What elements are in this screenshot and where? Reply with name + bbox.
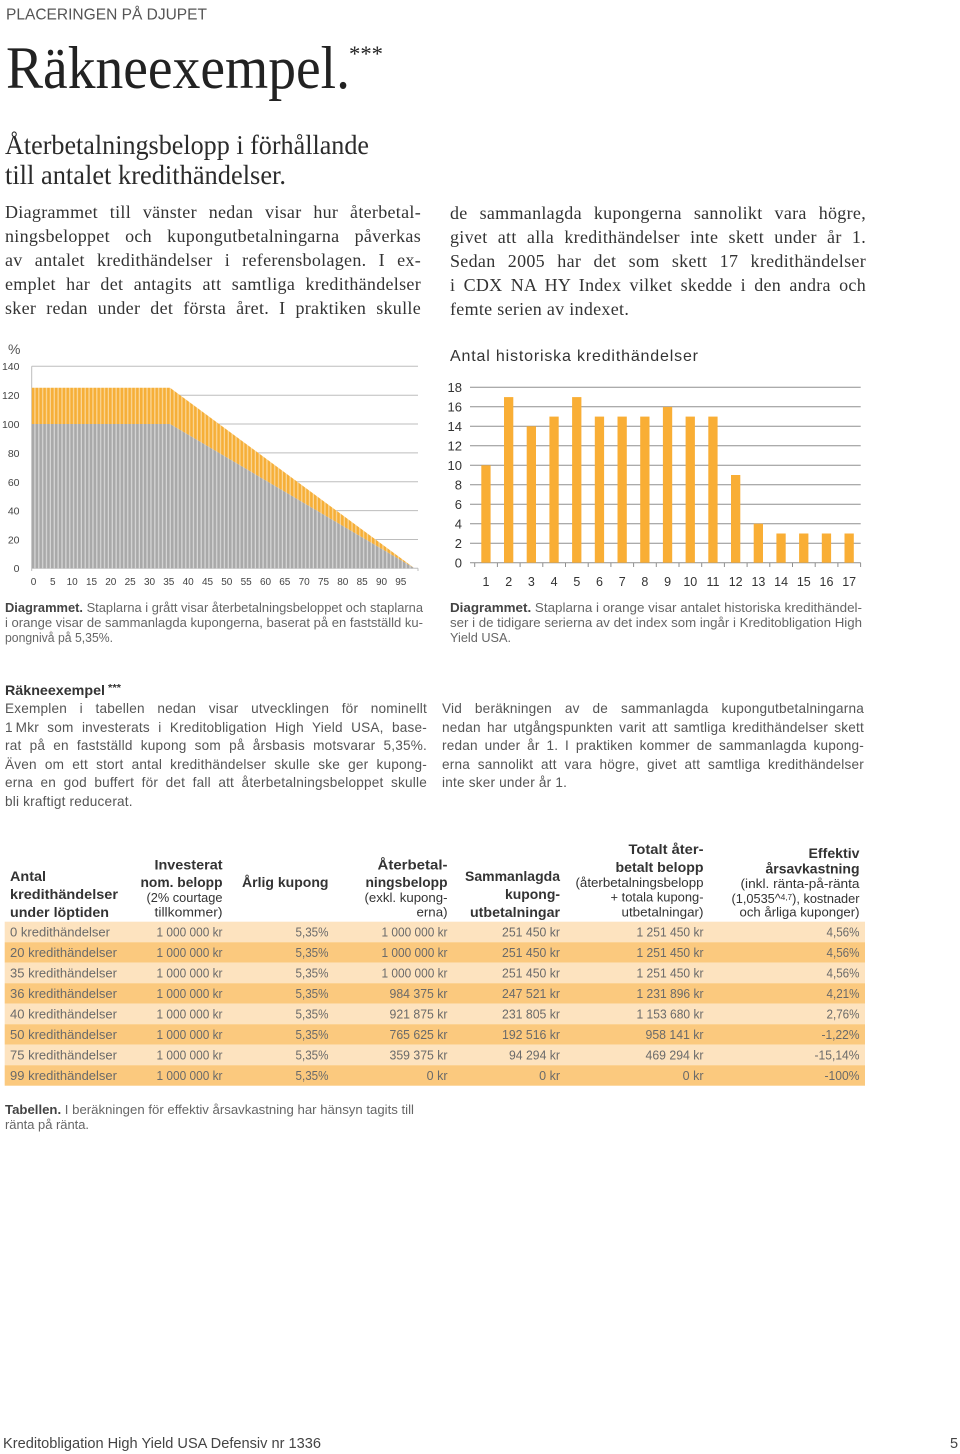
example text: left column: 1 Mkr som investerats i Kreditobligation High Yield USA, base- xyxy=(5,720,427,735)
column: repayment: 921 875 kr xyxy=(390,1008,448,1022)
column: invested: 1 000 000 kr xyxy=(156,1028,222,1042)
column: repayment xyxy=(382,926,448,1083)
y axis labels: 0 xyxy=(14,563,20,575)
subtitle xyxy=(5,130,369,190)
column: coupon total: 251 450 kr xyxy=(502,946,560,960)
column: total repaid: 1 231 896 kr xyxy=(636,987,704,1001)
y axis labels: 14 xyxy=(448,419,462,434)
header: effective annual return: 4,7 xyxy=(781,893,793,902)
x axis labels: 15 xyxy=(797,575,811,589)
caption: left chart: pongnivå på 5,35%. xyxy=(5,631,113,645)
column: coupon total: 251 450 kr xyxy=(502,926,560,940)
header: number of events xyxy=(10,868,119,920)
header: repayment amount: (exkl. kupong- xyxy=(364,891,448,905)
header: repayment amount xyxy=(364,856,448,920)
y axis labels: 80 xyxy=(8,448,20,460)
y axis labels: 20 xyxy=(8,534,20,546)
subtitle: till antalet kredithändelser. xyxy=(5,160,286,190)
y axis labels: 2 xyxy=(455,536,462,551)
x axis labels: 2 xyxy=(505,575,512,589)
title: *** xyxy=(349,41,383,66)
header: total coupons: utbetalningar xyxy=(470,904,561,920)
table note: ränta på ränta. xyxy=(5,1118,89,1132)
caption: right chart: ser i de tidigare serierna av det index som ingår i Kreditobligation High xyxy=(450,616,862,630)
x axis labels: 80 xyxy=(337,577,349,588)
y axis labels: 60 xyxy=(8,477,20,489)
example text: left column xyxy=(5,701,427,809)
x axis labels: 15 xyxy=(86,577,97,588)
column: invested xyxy=(156,926,222,1083)
x axis labels: 90 xyxy=(376,577,387,588)
x axis labels: 14 xyxy=(774,575,788,589)
table header xyxy=(10,841,860,920)
x axis labels xyxy=(31,577,407,588)
y axis labels xyxy=(448,380,462,570)
header: total repaid: + totala kupong- xyxy=(610,890,704,904)
table body xyxy=(10,926,860,1083)
y axis labels: 100 xyxy=(2,419,20,431)
column: coupon total: 192 516 kr xyxy=(502,1028,560,1042)
footer xyxy=(3,1436,958,1452)
header: annual coupon: Årlig kupong xyxy=(242,874,328,890)
intro text: right column: Sedan 2005 har det som skett 17 kredithändelser xyxy=(450,251,866,271)
column: invested: 1 000 000 kr xyxy=(156,1048,222,1062)
x axis labels xyxy=(483,575,856,589)
x axis labels: 17 xyxy=(842,575,856,589)
x axis labels: 6 xyxy=(596,575,603,589)
header: effective annual return: (1,0535^ xyxy=(732,892,780,906)
x axis labels: 3 xyxy=(528,575,535,589)
column: credit events: 0 kredithändelser xyxy=(10,926,110,940)
column: credit events: 99 kredithändelser xyxy=(10,1069,117,1083)
example text: left column: Exemplen i tabellen nedan visar utvecklingen för nominellt xyxy=(5,701,427,716)
y axis labels: 120 xyxy=(2,390,20,402)
header: total coupons: Sammanlagda xyxy=(465,868,560,884)
header: number of events: under löptiden xyxy=(10,904,109,920)
title: Räkneexempel. xyxy=(6,35,350,101)
footer: Kreditobligation High Yield USA Defensiv nr 1336 xyxy=(3,1436,321,1452)
table note xyxy=(5,1103,414,1132)
header: effective annual return: (inkl. ränta-på-ränta xyxy=(740,877,860,891)
x axis labels: 10 xyxy=(67,577,78,588)
column: repayment: 984 375 kr xyxy=(390,987,448,1001)
grey bars: repayment xyxy=(32,424,414,568)
column: effective return xyxy=(814,926,860,1083)
column: total repaid: 958 141 kr xyxy=(646,1028,704,1042)
column: credit events: 75 kredithändelser xyxy=(10,1048,117,1062)
example text: right column xyxy=(442,701,864,790)
x axis labels: 65 xyxy=(279,577,291,588)
caption: right chart: Diagrammet. Staplarna i orange visar antalet historiska kredithändel- xyxy=(450,601,862,615)
header: repayment amount: erna) xyxy=(416,906,448,920)
example text: right column: redan under år 1. I praktiken kommer de sammanlagda kupong- xyxy=(442,738,864,753)
column: coupon: 5,35% xyxy=(296,946,328,960)
y axis labels: 8 xyxy=(455,478,462,492)
subtitle: Återbetalningsbelopp i förhållande xyxy=(5,130,369,160)
caption: left chart: i orange visar de sammanlagda kupongerna, baserat på en fastställd ku- xyxy=(5,616,423,630)
column: effective return: 4,56% xyxy=(826,926,860,940)
x axis labels: 5 xyxy=(573,575,580,589)
x axis labels: 70 xyxy=(299,577,310,588)
header: total repaid: utbetalningar) xyxy=(622,906,704,920)
table background rows xyxy=(5,922,865,1086)
chart: repayment and coupons per number of credit events: % xyxy=(8,341,20,357)
header: effective annual return: årsavkastning xyxy=(766,860,860,876)
x axis labels: 1 xyxy=(483,575,490,589)
intro text: left column: Diagrammet till vänster nedan visar hur återbetal- xyxy=(5,202,421,222)
column: coupon: 5,35% xyxy=(296,1069,328,1083)
column: total repaid: 469 294 kr xyxy=(646,1048,704,1062)
chart: historical credit events per series xyxy=(448,380,861,589)
x axis labels: 12 xyxy=(729,575,743,589)
column: credit events: 20 kredithändelser xyxy=(10,946,117,960)
example text: left column: Även om ett stort antal kredithändelser skulle ske ger kupong- xyxy=(5,757,427,772)
column: effective return: -1,22% xyxy=(822,1028,860,1042)
header: effective annual return xyxy=(732,845,860,920)
example text: right column: inte sker under år 1. xyxy=(442,775,567,790)
example text: left column: rat på en fastställd kupong som på årsbasis motsvarar 5,35%. xyxy=(5,738,427,753)
intro text: right column: de sammanlagda kupongerna sannolikt vara högre, xyxy=(450,203,866,223)
caption: right chart xyxy=(450,601,862,645)
column: total repaid: 1 153 680 kr xyxy=(636,1008,704,1022)
intro text: right column: i CDX NA HY Index vilket skedde i den andra och xyxy=(450,275,866,295)
example text: right column: erna sannolikt att vara högre, givet att samtliga kredithändelser xyxy=(442,757,864,772)
header: total coupons xyxy=(465,868,561,920)
x axis labels: 85 xyxy=(357,577,368,588)
column: coupon xyxy=(296,926,328,1083)
intro text: left column: emplet har det antagits att samtliga kredithändelser xyxy=(5,274,421,294)
header: effective annual return: Effektiv xyxy=(808,845,860,861)
intro text: right column: givet att alla kredithändelser inte skett under år 1. xyxy=(450,227,866,247)
column: effective return: 4,56% xyxy=(826,966,860,980)
caption: left chart xyxy=(5,601,423,645)
heading: calculation example: Räkneexempel xyxy=(5,682,105,698)
column: coupon total xyxy=(502,926,560,1083)
example text: left column: bli kraftigt reducerat. xyxy=(5,794,133,809)
header: total repaid: Totalt åter- xyxy=(628,841,704,857)
x axis labels: 50 xyxy=(221,577,233,588)
column: invested: 1 000 000 kr xyxy=(156,926,222,940)
example text: right column: Vid beräkningen av de sammanlagda kupongutbetalningarna xyxy=(442,701,864,716)
x axis labels: 5 xyxy=(50,577,56,588)
intro text: left column: av antalet kredithändelser i referensbolagen. I ex- xyxy=(5,250,421,270)
y axis labels: 10 xyxy=(448,458,462,473)
chart: repayment and coupons per number of credit events xyxy=(2,341,418,588)
column: invested: 1 000 000 kr xyxy=(156,946,222,960)
x axis labels: 9 xyxy=(664,575,671,589)
column: credit events: 50 kredithändelser xyxy=(10,1028,117,1042)
header: invested amount xyxy=(140,856,223,920)
footer: 5 xyxy=(950,1436,958,1452)
column: repayment: 0 kr xyxy=(427,1069,448,1083)
column: effective return: 4,56% xyxy=(826,946,860,960)
x axis labels: 4 xyxy=(551,575,558,589)
header: number of events: Antal xyxy=(10,868,46,884)
y axis labels: 4 xyxy=(455,516,462,532)
x axis labels: 7 xyxy=(619,575,626,589)
example text: left column: erna en god buffert för det fall att återbetalningsbeloppet skulle xyxy=(5,775,427,790)
column: total repaid: 1 251 450 kr xyxy=(636,946,704,960)
x axis labels: 13 xyxy=(751,575,765,589)
x axis labels: 95 xyxy=(395,577,407,588)
y axis labels xyxy=(2,361,20,575)
column: repayment: 1 000 000 kr xyxy=(382,946,448,960)
header: invested amount: tillkommer) xyxy=(154,906,222,920)
intro text: left column xyxy=(5,202,421,318)
column: credit events xyxy=(10,926,117,1083)
header: total repaid: betalt belopp xyxy=(616,859,704,875)
column: credit events: 36 kredithändelser xyxy=(10,987,117,1001)
y axis labels: 40 xyxy=(8,506,20,518)
x axis labels: 25 xyxy=(125,577,136,588)
column: total repaid: 1 251 450 kr xyxy=(636,966,704,980)
intro text: right column: femte serien av indexet. xyxy=(450,299,629,319)
column: coupon total: 0 kr xyxy=(539,1069,560,1083)
header: effective annual return: och årliga kuponger) xyxy=(740,906,860,920)
header: invested amount: Investerat xyxy=(154,856,223,872)
column: invested: 1 000 000 kr xyxy=(156,987,222,1001)
example text: right column: nedan har utgångspunkten varit att samtliga kredithändelser skett xyxy=(442,720,864,735)
heading: calculation example: *** xyxy=(108,683,121,694)
header: total coupons: kupong- xyxy=(505,886,560,902)
column: invested: 1 000 000 kr xyxy=(156,966,222,980)
orange bars: coupons xyxy=(32,388,414,568)
column: coupon: 5,35% xyxy=(296,987,328,1001)
intro text: right column xyxy=(450,203,866,319)
column: effective return: -100% xyxy=(824,1069,860,1083)
y axis labels: 140 xyxy=(2,361,20,373)
x axis labels: 16 xyxy=(820,575,833,589)
caption: right chart: Yield USA. xyxy=(450,631,511,645)
chart title: historical credit events: Antal historiska kredithändelser xyxy=(450,348,699,365)
y axis labels: 0 xyxy=(455,556,462,570)
x axis labels: 0 xyxy=(31,577,37,588)
column: credit events: 40 kredithändelser xyxy=(10,1008,117,1022)
x axis labels: 40 xyxy=(183,577,194,588)
caption: left chart: Diagrammet. Staplarna i grått visar återbetalningsbeloppet och staplarna xyxy=(5,601,423,615)
x axis labels: 8 xyxy=(641,575,648,589)
header: effective annual return: ), kostnader xyxy=(792,892,860,906)
column: repayment: 1 000 000 kr xyxy=(382,966,448,980)
x axis labels: 10 xyxy=(683,575,697,589)
column: total repaid: 0 kr xyxy=(683,1069,704,1083)
column: coupon: 5,35% xyxy=(296,926,328,940)
column: effective return: 2,76% xyxy=(826,1008,860,1022)
column: coupon total: 247 521 kr xyxy=(502,987,560,1001)
column: total repaid xyxy=(636,926,704,1083)
header: total repaid xyxy=(576,841,704,920)
x axis labels: 11 xyxy=(707,575,720,589)
column: effective return: 4,21% xyxy=(826,987,860,1001)
y axis labels: 16 xyxy=(448,400,462,414)
x axis labels: 45 xyxy=(202,577,213,588)
column: coupon: 5,35% xyxy=(296,1008,328,1022)
header: invested amount: (2% courtage xyxy=(146,891,223,905)
column: coupon: 5,35% xyxy=(296,966,328,980)
column: coupon: 5,35% xyxy=(296,1028,328,1042)
header: number of events: kredithändelser xyxy=(10,886,119,902)
column: effective return: -15,14% xyxy=(814,1048,860,1062)
y axis labels: 12 xyxy=(448,438,462,454)
intro text: left column: sker redan under det första året. I praktiken skulle xyxy=(5,298,421,318)
column: coupon total: 231 805 kr xyxy=(502,1008,560,1022)
column: credit events: 35 kredithändelser xyxy=(10,966,117,980)
header: total repaid: (återbetalningsbelopp xyxy=(576,876,704,890)
section label: PLACERINGEN PÅ DJUPET xyxy=(6,4,207,24)
orange bars xyxy=(481,397,854,563)
column: invested: 1 000 000 kr xyxy=(156,1008,222,1022)
x axis labels: 75 xyxy=(318,577,329,588)
x axis labels: 60 xyxy=(260,577,271,588)
x axis labels: 55 xyxy=(241,577,252,588)
x axis labels: 35 xyxy=(163,577,175,588)
header: repayment amount: Återbetal- xyxy=(378,856,448,872)
header: invested amount: nom. belopp xyxy=(140,874,222,890)
x axis labels: 30 xyxy=(144,577,155,588)
x axis labels: 20 xyxy=(105,577,117,588)
column: repayment: 359 375 kr xyxy=(390,1048,448,1062)
table note: Tabellen. I beräkningen för effektiv årsavkastning har hänsyn tagits till xyxy=(5,1103,414,1117)
column: invested: 1 000 000 kr xyxy=(156,1069,222,1083)
y axis labels: 6 xyxy=(455,497,462,512)
column: coupon total: 94 294 kr xyxy=(509,1048,560,1062)
column: total repaid: 1 251 450 kr xyxy=(636,926,704,940)
column: coupon total: 251 450 kr xyxy=(502,966,560,980)
column: repayment: 1 000 000 kr xyxy=(382,926,448,940)
column: coupon: 5,35% xyxy=(296,1048,328,1062)
header: repayment amount: ningsbelopp xyxy=(366,874,448,890)
y axis labels: 18 xyxy=(448,380,462,395)
intro text: left column: ningsbeloppet och kupongutbetalningarna påverkas xyxy=(5,226,421,246)
column: repayment: 765 625 kr xyxy=(390,1028,448,1042)
